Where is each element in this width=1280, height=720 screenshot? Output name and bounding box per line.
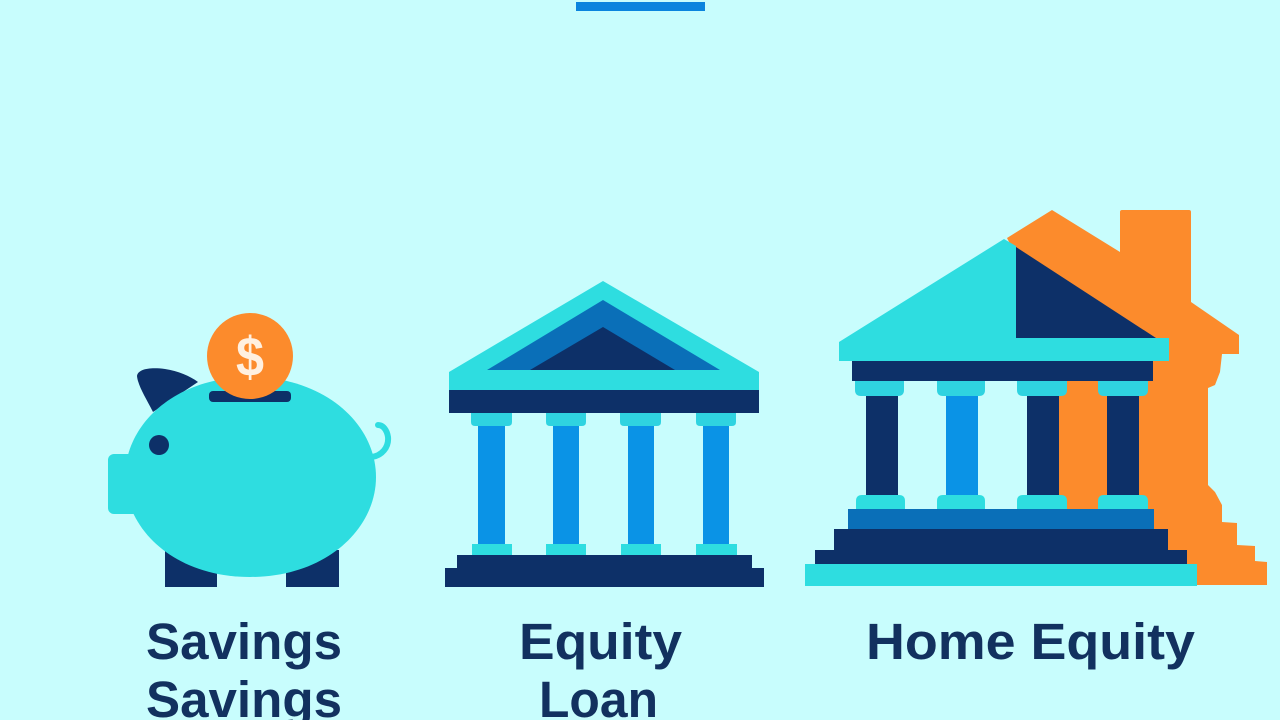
panel: savings bbox=[108, 313, 388, 720]
column capitals bbox=[855, 381, 1148, 396]
pediment inner blue bbox=[487, 300, 720, 370]
label: savings bbox=[146, 613, 342, 720]
pediment inner navy bbox=[530, 327, 675, 370]
label: home equity: Home Equity bbox=[866, 613, 1196, 670]
label: savings: Savings bbox=[146, 613, 342, 670]
icon: piggy bank bbox=[108, 313, 388, 587]
navy steps bbox=[815, 529, 1187, 564]
teal pediment bbox=[839, 239, 1169, 361]
column bases bbox=[856, 495, 1148, 509]
pig snout bbox=[108, 454, 148, 514]
label: equity loan: Equity bbox=[519, 613, 683, 670]
pediment bbox=[449, 281, 759, 390]
teal plinth bbox=[805, 564, 1197, 586]
coin bbox=[207, 313, 293, 399]
columns bbox=[478, 426, 729, 544]
navy pediment triangle bbox=[1016, 247, 1156, 338]
entablature bbox=[852, 361, 1153, 381]
top accent bar bbox=[576, 2, 705, 11]
coin: $ bbox=[236, 325, 264, 388]
entablature bbox=[449, 390, 759, 413]
column capitals bbox=[471, 413, 736, 426]
icon: bank with house bbox=[805, 210, 1267, 586]
pig body bbox=[125, 377, 376, 577]
column bases bbox=[472, 544, 737, 555]
pig eye bbox=[149, 435, 169, 455]
icon: bank building bbox=[445, 281, 764, 587]
coin slot bbox=[209, 391, 291, 402]
pig tail bbox=[371, 425, 388, 457]
label: equity loan bbox=[519, 613, 683, 720]
pig legs bbox=[165, 550, 339, 587]
house silhouette bbox=[1007, 210, 1267, 585]
columns bbox=[866, 381, 1139, 509]
panel: home equity bbox=[805, 210, 1267, 670]
stepped base bbox=[445, 555, 764, 587]
panel: equity loan bbox=[445, 281, 764, 720]
blue step bbox=[848, 509, 1154, 529]
pig ear bbox=[137, 368, 198, 412]
